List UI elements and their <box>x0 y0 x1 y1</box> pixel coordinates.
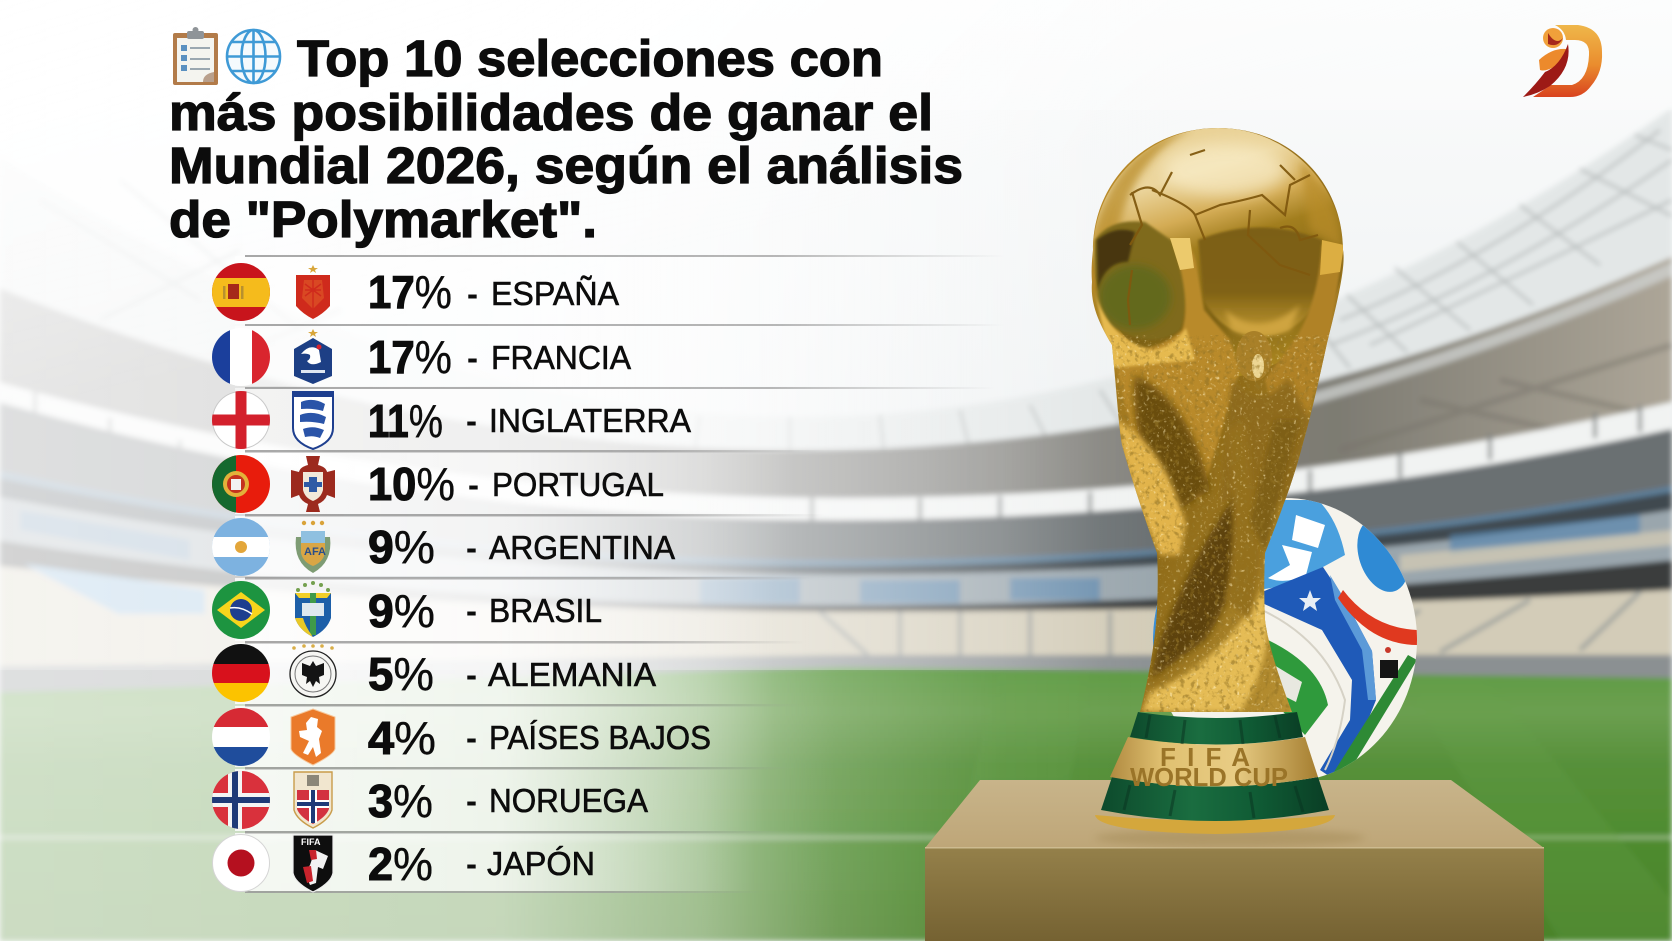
team name: - <box>466 592 477 629</box>
team name: ARGENTINA <box>489 529 675 566</box>
row: Argentina <box>212 518 675 576</box>
title: más posibilidades de ganar el <box>169 84 933 141</box>
base text: FIFA WORLD CUP <box>1130 742 1288 792</box>
crest: Argentina: AFA <box>304 546 326 558</box>
percent: 4% <box>368 712 436 764</box>
row: Japón <box>212 834 595 892</box>
percent: 17% <box>368 266 452 318</box>
crest: Japón <box>293 835 333 892</box>
crest: Inglaterra <box>293 392 333 449</box>
trophy malachite and gold base <box>1095 712 1335 834</box>
row: Portugal <box>212 455 664 513</box>
flag: Japón <box>212 834 270 892</box>
icon: clipboard <box>173 27 218 85</box>
list of teams <box>212 263 711 892</box>
percent: 11% <box>368 395 443 447</box>
percent: 3% <box>368 775 433 827</box>
team name: - <box>466 529 477 566</box>
crest: Argentina <box>296 521 330 573</box>
row: España <box>212 263 619 321</box>
barrier <box>0 655 1672 692</box>
percent: 9% <box>368 585 435 637</box>
white light band <box>0 383 1672 520</box>
team name: - <box>467 275 478 312</box>
crest: Portugal <box>291 456 335 512</box>
trophy globe <box>1093 128 1343 378</box>
soccer ball <box>1140 498 1418 782</box>
team name: - <box>466 845 477 882</box>
team name: ESPAÑA <box>491 275 619 312</box>
dark strip <box>0 540 1672 612</box>
glass roof <box>0 108 1672 450</box>
row: Inglaterra <box>212 391 691 449</box>
flag: Francia <box>212 328 270 386</box>
middle seats <box>0 498 1672 605</box>
flag: Noruega <box>212 771 270 829</box>
crest: España <box>296 265 330 319</box>
trophy twisted base <box>1116 420 1300 712</box>
left lobe reflection <box>1095 221 1186 340</box>
trophy arms and figure <box>1093 238 1344 515</box>
crest: Países Bajos <box>291 709 335 765</box>
crest: Japón: FIFA <box>301 837 321 847</box>
lower seats <box>0 567 1672 666</box>
team name: INGLATERRA <box>489 402 691 439</box>
percent: 9% <box>368 521 435 573</box>
team name: BRASIL <box>489 592 602 629</box>
title <box>169 27 963 248</box>
flag: España <box>212 263 270 321</box>
title: Top 10 selecciones con <box>297 30 883 87</box>
roof underside <box>0 257 1672 498</box>
flag: Brasil <box>212 581 270 639</box>
team name: NORUEGA <box>489 782 648 819</box>
team name: - <box>466 782 477 819</box>
team name: - <box>468 466 479 503</box>
team name: FRANCIA <box>491 339 631 376</box>
percent: 10% <box>368 458 455 510</box>
pitch <box>0 655 1672 941</box>
team name: JAPÓN <box>487 845 595 882</box>
team name: - <box>467 339 478 376</box>
crest: Brasil <box>295 581 331 637</box>
flag: Argentina <box>212 518 270 576</box>
flag: Países Bajos <box>212 708 270 766</box>
percent: 5% <box>368 648 434 700</box>
flag: Inglaterra <box>212 391 270 449</box>
team name: PORTUGAL <box>492 466 664 503</box>
logo <box>1523 25 1602 97</box>
row: Brasil <box>212 581 602 639</box>
percent: 17% <box>368 331 452 383</box>
flag: Portugal <box>212 455 270 513</box>
flag: Alemania <box>212 644 270 702</box>
title: de "Polymarket". <box>169 191 597 248</box>
row: Noruega <box>212 771 648 829</box>
percent: 2% <box>368 838 433 890</box>
pedestal <box>925 780 1544 941</box>
team name: - <box>466 656 477 693</box>
upper tier <box>0 402 1672 560</box>
team name: PAÍSES BAJOS <box>489 719 711 756</box>
base text: FIFA WORLD CUP: FIFA <box>1160 742 1250 772</box>
team name: - <box>466 719 477 756</box>
list row bands <box>235 255 1005 893</box>
base text: FIFA WORLD CUP: WORLD CUP <box>1130 762 1288 792</box>
row: Alemania <box>212 644 656 702</box>
crest: Alemania <box>290 644 336 697</box>
row: Países Bajos <box>212 708 711 766</box>
team name: - <box>466 402 477 439</box>
team name: ALEMANIA <box>488 656 656 693</box>
crest: Francia <box>294 329 332 384</box>
trophy <box>1085 120 1355 834</box>
row: Francia <box>212 328 631 386</box>
title: Mundial 2026, según el análisis <box>169 137 963 194</box>
icon: globe <box>227 30 280 83</box>
crest: Noruega <box>294 772 332 828</box>
central lobe <box>1198 228 1322 335</box>
